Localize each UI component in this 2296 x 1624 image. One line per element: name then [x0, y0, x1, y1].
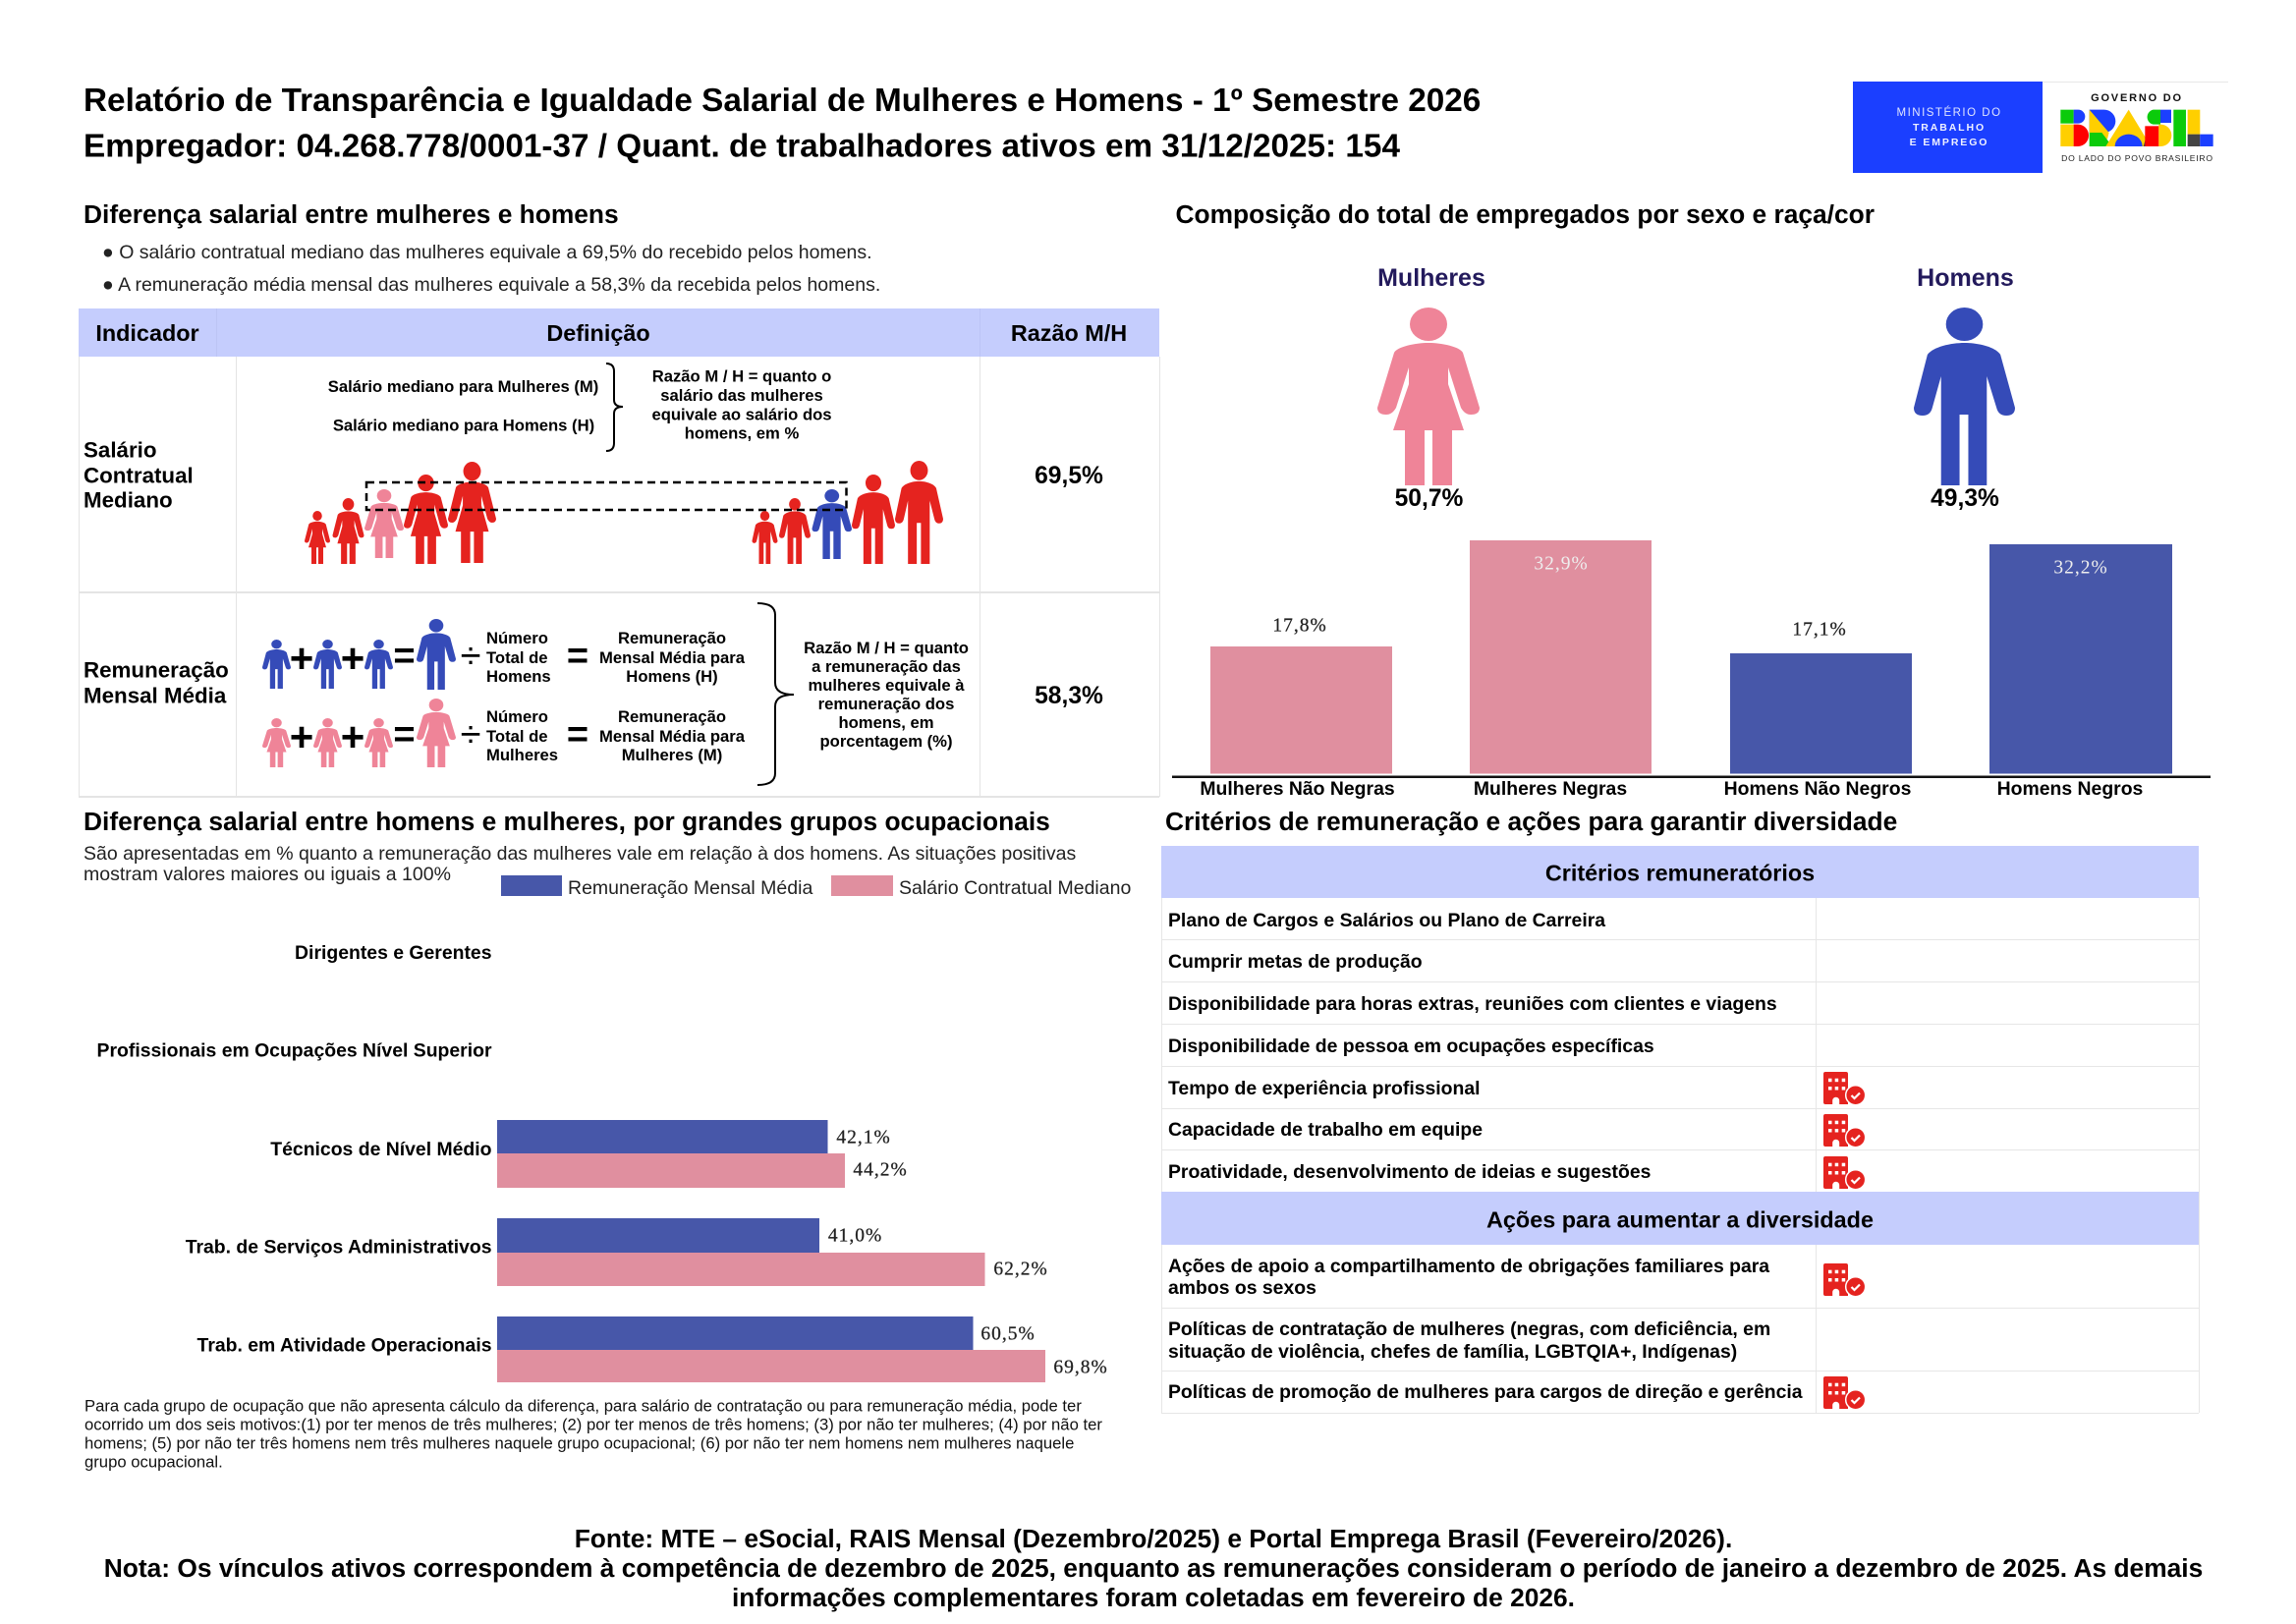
bars: Trab. de Serviços Administrativos: 62,2%: [993, 1260, 1048, 1279]
text: número total de mulheres: Mulheres: [486, 746, 558, 764]
equals sign: =: [567, 636, 588, 677]
bars: Trab. de Serviços Administrativos: [497, 1218, 1048, 1286]
footer: fonte e nota: Nota: Os vínculos ativos correspondem à competência de dezembro de 2025, enquanto as remunerações consideram o período de janeiro a dezembro de 2025. As demais: [104, 1553, 2203, 1583]
panel: tabela de indicadores: [79, 308, 1160, 798]
table header: [79, 308, 1159, 357]
icons: soma de homens: =: [393, 636, 416, 677]
text: remuneração média homens: Remuneração: [618, 629, 726, 647]
icons: soma de mulheres: =: [393, 714, 416, 756]
text: remuneração média homens: Homens (H): [626, 667, 718, 686]
category labels: Técnicos de Nível Médio: [270, 1139, 492, 1160]
value: 69,5%: 69,5%: [1035, 463, 1103, 489]
text: remuneração média mulheres: [599, 707, 746, 764]
dashed box: medianas: [366, 482, 847, 510]
criteria rows: [1168, 910, 1777, 1183]
title: Relatório de Transparência e Igualdade Salarial de Mulheres e Homens - 1º Semestre 2026: [84, 83, 1481, 119]
row label: Salário Contratual Mediano: Mediano: [84, 487, 173, 513]
icons: soma de homens: ÷: [461, 636, 480, 677]
row label: Remuneração Mensal Média: [84, 658, 229, 707]
bars: Trab. em Atividade Operacionais: 60,5%: [980, 1324, 1036, 1344]
icons: soma de mulheres: +: [341, 713, 364, 760]
text: explicação: São apresentadas em % quanto a remuneração das mulheres vale em relação à dos homens. As situações positivas: [84, 843, 1076, 865]
value: 58,3%: 58,3%: [1035, 683, 1103, 709]
axis labels: [1200, 778, 2143, 800]
text: salário mediano: [328, 377, 598, 434]
footnote: Para cada grupo de ocupação que não apresenta cálculo da diferença, para salário de contratação ou para remuneração média, pode ter: [84, 1397, 1082, 1415]
panel: mulheres: [1377, 264, 1485, 512]
icons: soma de homens: +: [290, 635, 313, 682]
title: [84, 83, 1481, 165]
text: explicação: [84, 843, 1076, 885]
action rows: ambos os sexos: [1168, 1277, 1316, 1299]
text: explicação razão salário: [651, 367, 832, 442]
footer: fonte e nota: Fonte: MTE – eSocial, RAIS Mensal (Dezembro/2025) e Portal Emprega Brasil (Fevereiro/2026).: [575, 1524, 1732, 1553]
header: Ações para aumentar a diversidade: Ações para aumentar a diversidade: [1486, 1206, 1874, 1232]
icon: brace: [606, 364, 623, 451]
heading: grupos ocupacionais: Diferença salarial entre homens e mulheres, por grandes grupos ocupacionais: [84, 807, 1050, 836]
text: explicação razão remuneração: Razão M / H = quanto: [804, 639, 969, 657]
bars: Técnicos de Nível Médio: 44,2%: [853, 1159, 908, 1181]
criteria rows: Capacidade de trabalho em equipe: [1168, 1119, 1483, 1141]
heading: critérios: Critérios de remuneração e ações para garantir diversidade: [1165, 807, 1897, 836]
text: número total de mulheres: Total de: [486, 727, 548, 746]
legend: Salário Contratual Mediano: [899, 877, 1131, 899]
footnote: [84, 1397, 1102, 1472]
row label: Salário Contratual Mediano: Salário: [84, 438, 157, 462]
text: explicação razão remuneração: porcentagem (%): [819, 732, 953, 751]
legend: [501, 875, 1131, 899]
bar chart: grupos ocupacionais: [97, 942, 1108, 1382]
icons: soma de mulheres: +: [290, 713, 313, 760]
icon: large brace: [757, 603, 794, 785]
text: salário mediano: Salário mediano para Mulheres (M): [328, 377, 598, 396]
icons: mulheres em fila: [305, 462, 496, 564]
icons: soma de mulheres: ÷: [461, 714, 480, 756]
icons: soma de homens: +: [341, 635, 364, 682]
heading: composição: Composição do total de empregados por sexo e raça/cor: [1175, 199, 1875, 229]
icon: building check, Políticas de promoção: [1823, 1376, 1866, 1410]
text: explicação razão salário: Razão M / H = quanto o: [652, 367, 831, 385]
bars: Trab. de Serviços Administrativos: 41,0%: [828, 1226, 882, 1246]
text: remuneração média mulheres: Remuneração: [618, 707, 726, 726]
action rows: Políticas de contratação de mulheres (negras, com deficiência, em: [1168, 1318, 1770, 1340]
icons: soma de homens: [262, 619, 480, 690]
text: número total de mulheres: Número: [486, 707, 548, 726]
row label: Salário Contratual Mediano: Contratual: [84, 464, 194, 487]
text: remuneração média mulheres: Mulheres (M): [622, 746, 722, 764]
text: explicação razão remuneração: [804, 639, 969, 751]
axis labels: Homens Não Negros: [1724, 778, 1911, 800]
action rows: Ações de apoio a compartilhamento de obrigações familiares para: [1168, 1256, 1769, 1277]
logo: Governo do Brasil: GOVERNO DO: [2091, 92, 2183, 104]
text: explicação razão remuneração: mulheres equivale à: [808, 676, 965, 695]
text: número total de mulheres: [486, 707, 558, 764]
bar: Homens Negros: [1989, 544, 2172, 774]
bullets: resumo: [102, 242, 880, 296]
bars: Trab. em Atividade Operacionais: [497, 1316, 1108, 1382]
legend: Remuneração Mensal Média: [568, 877, 812, 899]
text: número total de homens: Homens: [486, 667, 551, 686]
criteria rows: Cumprir metas de produção: [1168, 951, 1423, 973]
bar: Homens Não Negros: 17,1%: [1792, 619, 1847, 641]
icons: homens em fila: [753, 461, 943, 564]
logo: Ministério do Trabalho e Emprego: MINISTÉRIO DO: [1896, 106, 2002, 119]
text: explicação razão salário: salário das mulheres: [660, 386, 823, 405]
text: explicação: mostram valores maiores ou iguais a 100%: [84, 864, 451, 885]
category labels: [97, 942, 492, 1356]
text: número total de homens: Número: [486, 629, 548, 647]
value: 50,7%: 50,7%: [1395, 485, 1463, 512]
axis labels: Homens Negros: [1997, 778, 2143, 800]
bullets: resumo: ● A remuneração média mensal das mulheres equivale a 58,3% da recebida pelos homens.: [102, 274, 880, 296]
icon: building check, Ações de apoio: [1823, 1263, 1866, 1297]
criteria rows: Proatividade, desenvolvimento de ideias e sugestões: [1168, 1161, 1651, 1183]
criteria rows: Plano de Cargos e Salários ou Plano de Carreira: [1168, 910, 1605, 931]
text: salário mediano: Salário mediano para Homens (H): [333, 417, 594, 434]
panel: critérios remuneratórios e ações: [1161, 846, 2200, 1414]
table header: Indicador: [95, 320, 199, 346]
panel: homens: Homens: [1917, 264, 2014, 292]
bar chart: composição por raça/cor: [1172, 540, 2211, 800]
text: número total de homens: Total de: [486, 648, 548, 667]
bars: Técnicos de Nível Médio: [497, 1120, 908, 1188]
icon: building check, Capacidade: [1823, 1114, 1866, 1148]
title: Empregador: 04.268.778/0001-37 / Quant. de trabalhadores ativos em 31/12/2025: 154: [84, 128, 1400, 165]
action rows: [1168, 1256, 1803, 1403]
footnote: grupo ocupacional.: [84, 1452, 223, 1472]
header: Ações para aumentar a diversidade: [1161, 1192, 2199, 1245]
category labels: Dirigentes e Gerentes: [295, 942, 491, 964]
action rows: Políticas de promoção de mulheres para cargos de direção e gerência: [1168, 1381, 1803, 1403]
bar: Mulheres Negras: [1470, 540, 1652, 774]
bullets: resumo: ● O salário contratual mediano das mulheres equivale a 69,5% do recebido pelos homens.: [102, 242, 872, 263]
bar: Homens Não Negros: [1730, 619, 1912, 774]
text: explicação razão remuneração: homens, em: [838, 713, 934, 732]
text: remuneração média homens: Mensal Média para: [599, 648, 746, 667]
criteria rows: Tempo de experiência profissional: [1168, 1078, 1481, 1099]
footer: fonte e nota: informações complementares foram coletadas em fevereiro de 2026.: [732, 1583, 1575, 1612]
panel: mulheres: Mulheres: [1377, 264, 1485, 292]
icons: soma de mulheres: [262, 699, 480, 767]
table header: Razão M/H: [1011, 320, 1127, 346]
criteria rows: Disponibilidade de pessoa em ocupações específicas: [1168, 1036, 1654, 1057]
text: remuneração média mulheres: Mensal Média para: [599, 727, 746, 746]
icon: building check, Proatividade: [1823, 1156, 1866, 1190]
bar: Mulheres Não Negras: 17,8%: [1272, 615, 1327, 637]
category labels: Trab. de Serviços Administrativos: [186, 1236, 491, 1258]
icon: woman: [1377, 308, 1480, 485]
row label: Remuneração Mensal Média: Remuneração: [84, 658, 229, 682]
logo: Governo do Brasil: DO LADO DO POVO BRASILEIRO: [2061, 153, 2213, 163]
bar: Homens Negros: 32,2%: [2053, 558, 2108, 578]
value: 49,3%: 49,3%: [1931, 485, 1999, 512]
icon: man: [1914, 308, 2015, 485]
bar: Mulheres Não Negras: [1210, 615, 1392, 774]
row label: Salário Contratual Mediano: [84, 438, 194, 513]
logo: Governo do Brasil: [2043, 82, 2228, 163]
axis labels: Mulheres Não Negras: [1200, 778, 1395, 800]
text: explicação razão remuneração: remuneração dos: [818, 695, 954, 713]
criteria rows: Disponibilidade para horas extras, reuniões com clientes e viagens: [1168, 993, 1777, 1015]
axis labels: Mulheres Negras: [1474, 778, 1627, 800]
logo: Ministério do Trabalho e Emprego: TRABALHO: [1913, 122, 1986, 134]
logo: Ministério do Trabalho e Emprego: [1853, 82, 2043, 173]
text: número total de homens: [486, 629, 551, 686]
action rows: situação de violência, chefes de família, LGBTQIA+, Indígenas): [1168, 1341, 1737, 1363]
footer: fonte e nota: [104, 1524, 2203, 1612]
header: Critérios remuneratórios: Critérios remuneratórios: [1545, 861, 1815, 886]
bars: Técnicos de Nível Médio: 42,1%: [836, 1128, 891, 1148]
logo: Ministério do Trabalho e Emprego: E EMPREGO: [1910, 137, 1988, 148]
bars: Trab. em Atividade Operacionais: 69,8%: [1053, 1358, 1108, 1377]
text: explicação razão salário: equivale ao salário dos: [651, 405, 832, 424]
header: Critérios remuneratórios: [1161, 846, 2199, 898]
bar: Mulheres Negras: 32,9%: [1534, 554, 1589, 574]
footnote: ocorrido um dos seis motivos:(1) por ter menos de três mulheres; (2) por ter menos de três homens; (3) por não ter mulheres; (4) por não ter: [84, 1415, 1102, 1434]
category labels: Trab. em Atividade Operacionais: [197, 1334, 491, 1356]
text: explicação razão remuneração: a remuneração das: [812, 657, 961, 676]
category labels: Profissionais em Ocupações Nível Superior: [97, 1039, 492, 1061]
footnote: homens; (5) por não ter três homens nem três mulheres naquele grupo ocupacional; (6) por não ter nem homens nem mulheres naquele: [84, 1434, 1074, 1452]
panel: homens: [1914, 264, 2015, 512]
table header: Definição: [546, 320, 650, 346]
row label: Remuneração Mensal Média: Mensal Média: [84, 684, 227, 707]
icon: building check, Tempo de experiência: [1823, 1072, 1866, 1105]
equals sign: =: [567, 714, 588, 756]
text: explicação razão salário: homens, em %: [685, 424, 799, 442]
heading: diferença salarial: Diferença salarial entre mulheres e homens: [84, 199, 619, 229]
text: remuneração média homens: [599, 629, 746, 686]
